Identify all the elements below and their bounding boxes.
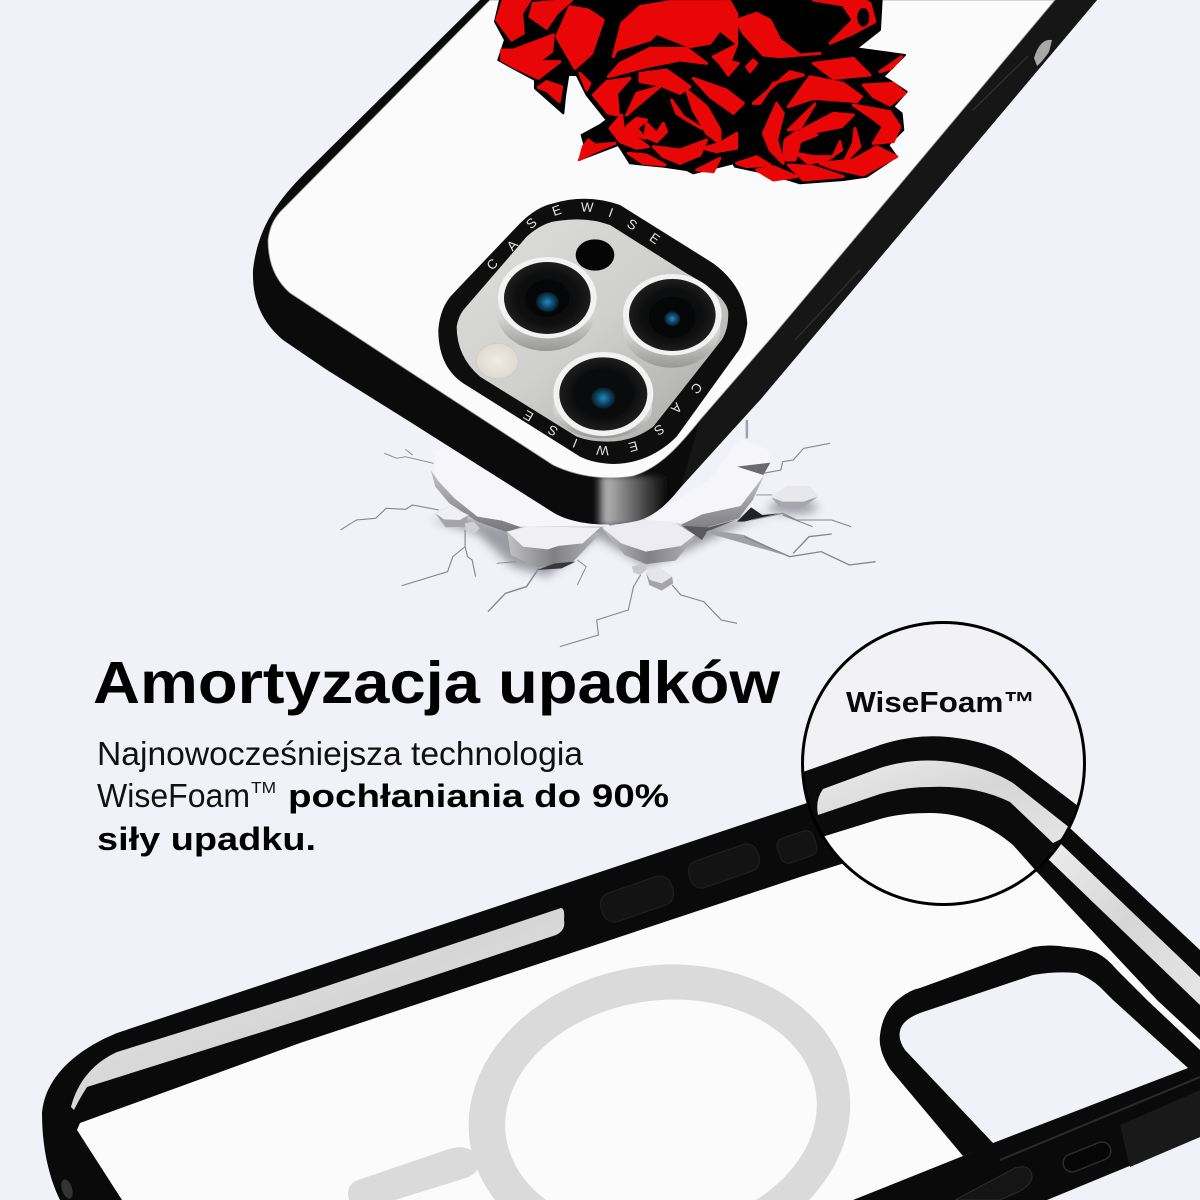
microphone hole <box>576 239 614 271</box>
bezel lettering: I <box>571 436 580 451</box>
body copy <box>97 735 669 857</box>
side buttons <box>597 829 819 925</box>
body copy: WiseFoam <box>97 777 250 814</box>
white back panel <box>268 0 1055 478</box>
camera opening <box>457 219 728 442</box>
illustration: cracked ground <box>341 420 876 647</box>
case frame <box>42 752 1200 1200</box>
bezel lettering: C <box>483 255 501 273</box>
bezel lettering: I <box>607 205 615 220</box>
bottom band details <box>955 1077 1200 1200</box>
right edge tone <box>681 0 1097 487</box>
bezel lettering: S <box>624 216 640 233</box>
body copy: siły upadku. <box>97 821 316 857</box>
charging port <box>59 1178 75 1200</box>
phone: top, back of case <box>253 0 1097 526</box>
bezel lettering: E <box>647 230 663 247</box>
crack hole and wedges <box>737 507 779 522</box>
bezel lettering: E <box>550 202 563 219</box>
illustration: red roses <box>495 0 907 183</box>
rose silhouette <box>495 0 907 183</box>
rose petals <box>497 0 905 180</box>
foam strip: right side <box>1047 843 1200 1005</box>
flash <box>476 343 518 379</box>
magnetic alignment bar <box>348 1147 479 1200</box>
bezel lettering: S <box>545 422 560 439</box>
left plate edge <box>431 470 521 532</box>
body copy: TM <box>251 780 276 797</box>
camera module <box>438 199 747 464</box>
right ground plate <box>646 438 770 523</box>
camera cutout frame <box>880 946 1200 1156</box>
magnetic ring <box>469 965 850 1200</box>
soft shadows <box>432 501 818 577</box>
rock: centre block <box>602 520 696 564</box>
camera cutout <box>900 972 1188 1143</box>
rock: left block <box>507 527 600 570</box>
bezel lettering: A <box>504 237 521 254</box>
bezel lettering: W <box>581 199 594 215</box>
title: Amortyzacja upadków <box>93 650 780 716</box>
rose black spot <box>857 8 869 27</box>
bezel lettering: E <box>521 407 536 425</box>
bezel lettering: E <box>627 438 640 455</box>
lens 3 <box>553 352 653 438</box>
lens 2 <box>623 274 722 368</box>
callout: WiseFoam magnifier <box>780 620 1090 910</box>
body copy: pochłaniania do 90% <box>288 778 669 814</box>
bezel lettering: A <box>668 400 685 417</box>
callout label: WiseFoam™ <box>846 687 1035 719</box>
bezel lettering <box>483 199 705 458</box>
phone: bottom, inside of clear case <box>42 752 1200 1200</box>
bezel lettering: S <box>651 421 667 439</box>
bezel lettering: C <box>688 379 705 397</box>
body copy: Najnowocześniejsza technologia <box>97 735 584 772</box>
camera bezel <box>438 199 747 464</box>
right plate edge <box>681 475 764 535</box>
foam strip: long side <box>71 908 564 1110</box>
bezel lettering: S <box>523 215 540 232</box>
clear interior <box>77 830 1200 1200</box>
rock: small stones <box>435 486 818 591</box>
bezel lettering: W <box>595 443 609 458</box>
crack lines <box>341 420 876 647</box>
bumper gloss <box>288 40 1052 526</box>
case bumper <box>253 0 1097 524</box>
left ground plate <box>435 440 611 527</box>
lens 1 <box>497 257 597 351</box>
